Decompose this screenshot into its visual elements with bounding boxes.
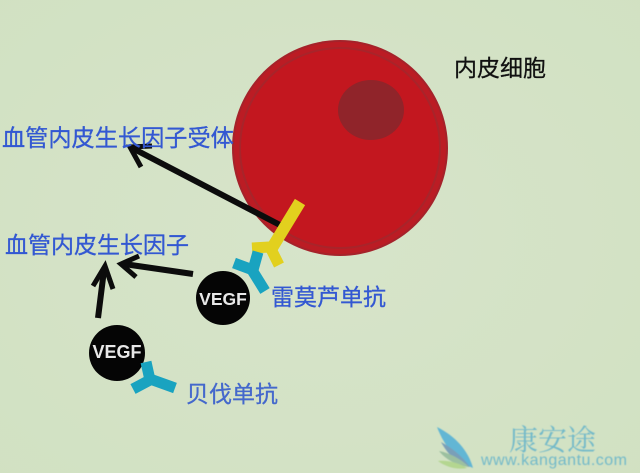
icon: wing [437, 427, 473, 469]
arrow: to receptor label [130, 146, 280, 225]
label: bevacizumab: 贝伐单抗 [186, 381, 278, 407]
label: VEGF: 血管内皮生长因子 [5, 232, 189, 258]
watermark logo [437, 418, 627, 469]
antibody: bevacizumab [133, 362, 175, 389]
watermark name: 康安途 [509, 418, 596, 459]
watermark url: www.kangantu.com [480, 452, 627, 469]
arrow: lower VEGF to label [93, 266, 113, 318]
label: endothelial cell: 内皮细胞 [454, 55, 546, 81]
VEGF molecule upper: VEGF [199, 289, 247, 309]
label: ramucirumab: 雷莫芦单抗 [271, 284, 386, 310]
cell nucleus [338, 80, 404, 140]
receptor: yellow [252, 202, 300, 265]
arrow: upper VEGF to label [121, 256, 193, 277]
VEGF molecule lower: VEGF [92, 342, 142, 362]
antibody: ramucirumab [234, 252, 265, 291]
label: VEGF receptor: 血管内皮生长因子受体 [2, 125, 234, 151]
endothelial cell [232, 40, 448, 256]
VEGF molecule lower [89, 325, 145, 381]
VEGF molecule upper [196, 271, 250, 325]
